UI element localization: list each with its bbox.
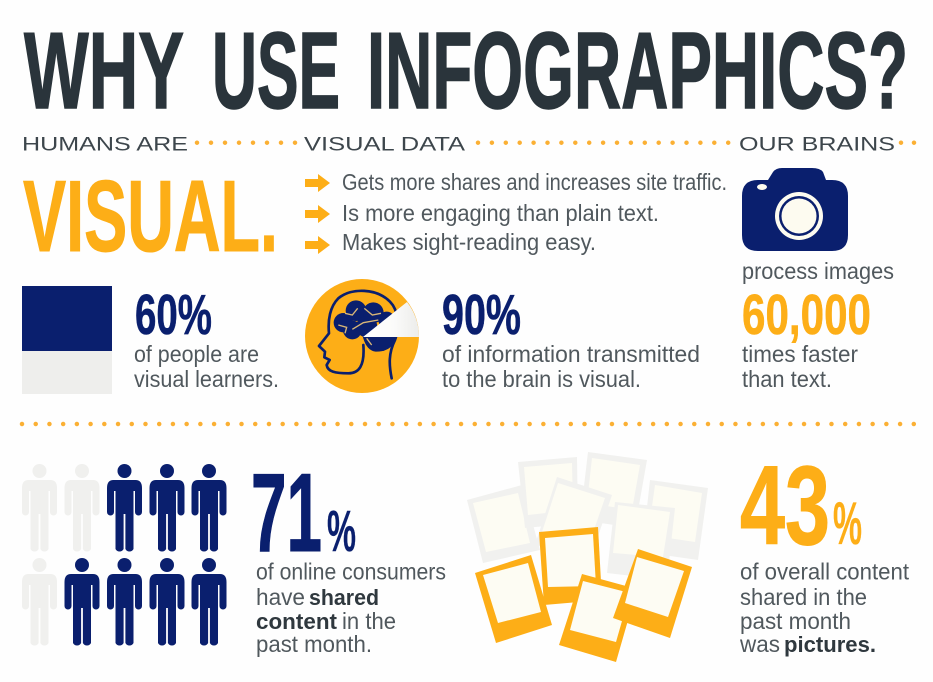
- benefit lines: Gets more shares and increases site traffic.: [342, 169, 727, 195]
- title: USE: [212, 10, 340, 132]
- text: shared caption: in the: [342, 608, 396, 634]
- text: shared caption: shared: [309, 585, 379, 610]
- stat: 90%: 90%: [442, 283, 521, 347]
- section headings row: VISUAL DATA: [304, 134, 465, 156]
- text: pictures caption: [739, 558, 910, 657]
- stat: 43%: 43: [740, 443, 830, 568]
- text: learners caption: of people are: [134, 341, 259, 367]
- title: [24, 10, 908, 132]
- text: brain caption: [442, 341, 700, 392]
- icon: arrow bullets: [305, 174, 330, 254]
- panel: visual data benefits list: [305, 169, 727, 255]
- text: pictures caption: of overall content: [740, 558, 910, 584]
- text: shared caption: content: [256, 609, 338, 634]
- chart: 60 percent square: [22, 286, 112, 394]
- stat: 60,000: 60,000: [742, 283, 871, 347]
- text: shared caption: of online consumers: [256, 558, 446, 584]
- text: shared caption: have: [256, 584, 305, 610]
- stat: 43%: %: [833, 490, 862, 557]
- panel: 90 percent brain: [305, 279, 700, 393]
- chart: people pictogram: [22, 464, 226, 646]
- panel: 60 percent visual learners: [22, 283, 279, 394]
- panel: 71 percent shared content: [22, 451, 446, 657]
- panel: 43 percent pictures: [467, 443, 910, 662]
- text: faster caption: [742, 341, 858, 392]
- text: process images: process images: [742, 258, 894, 284]
- text: brain caption: of information transmitted: [442, 341, 700, 367]
- benefit lines: [342, 169, 727, 255]
- icon: camera: [742, 168, 848, 251]
- text: pictures caption: shared in the: [740, 584, 867, 610]
- text: shared caption: past month.: [256, 631, 372, 657]
- text: learners caption: [134, 341, 279, 392]
- icon: brain pie chart: [305, 279, 419, 393]
- icon: grey photo stack: [467, 452, 708, 580]
- section headings row: OUR BRAINS: [739, 134, 895, 156]
- text: brain caption: to the brain is visual.: [442, 366, 641, 392]
- heading: VISUAL.: VISUAL.: [23, 161, 278, 273]
- benefit lines: Makes sight-reading easy.: [342, 229, 596, 255]
- text: faster caption: than text.: [742, 366, 832, 392]
- icon: yellow photo stack: [475, 527, 692, 662]
- section headings row: HUMANS ARE: [22, 134, 188, 156]
- text: faster caption: times faster: [742, 341, 858, 367]
- text: learners caption: visual learners.: [134, 366, 279, 392]
- title: WHY: [24, 10, 184, 132]
- section headings row: [22, 134, 915, 156]
- text: shared caption: [256, 558, 446, 657]
- stat: 71%: 71: [251, 451, 322, 575]
- panel: 60,000 times faster: [742, 283, 871, 392]
- stat: 71%: %: [327, 499, 356, 564]
- text: pictures caption: was: [739, 631, 780, 657]
- text: pictures caption: pictures.: [784, 632, 876, 657]
- stat: 60%: 60%: [135, 283, 212, 347]
- text: pictures caption: past month: [740, 608, 851, 634]
- benefit lines: Is more engaging than plain text.: [342, 200, 659, 226]
